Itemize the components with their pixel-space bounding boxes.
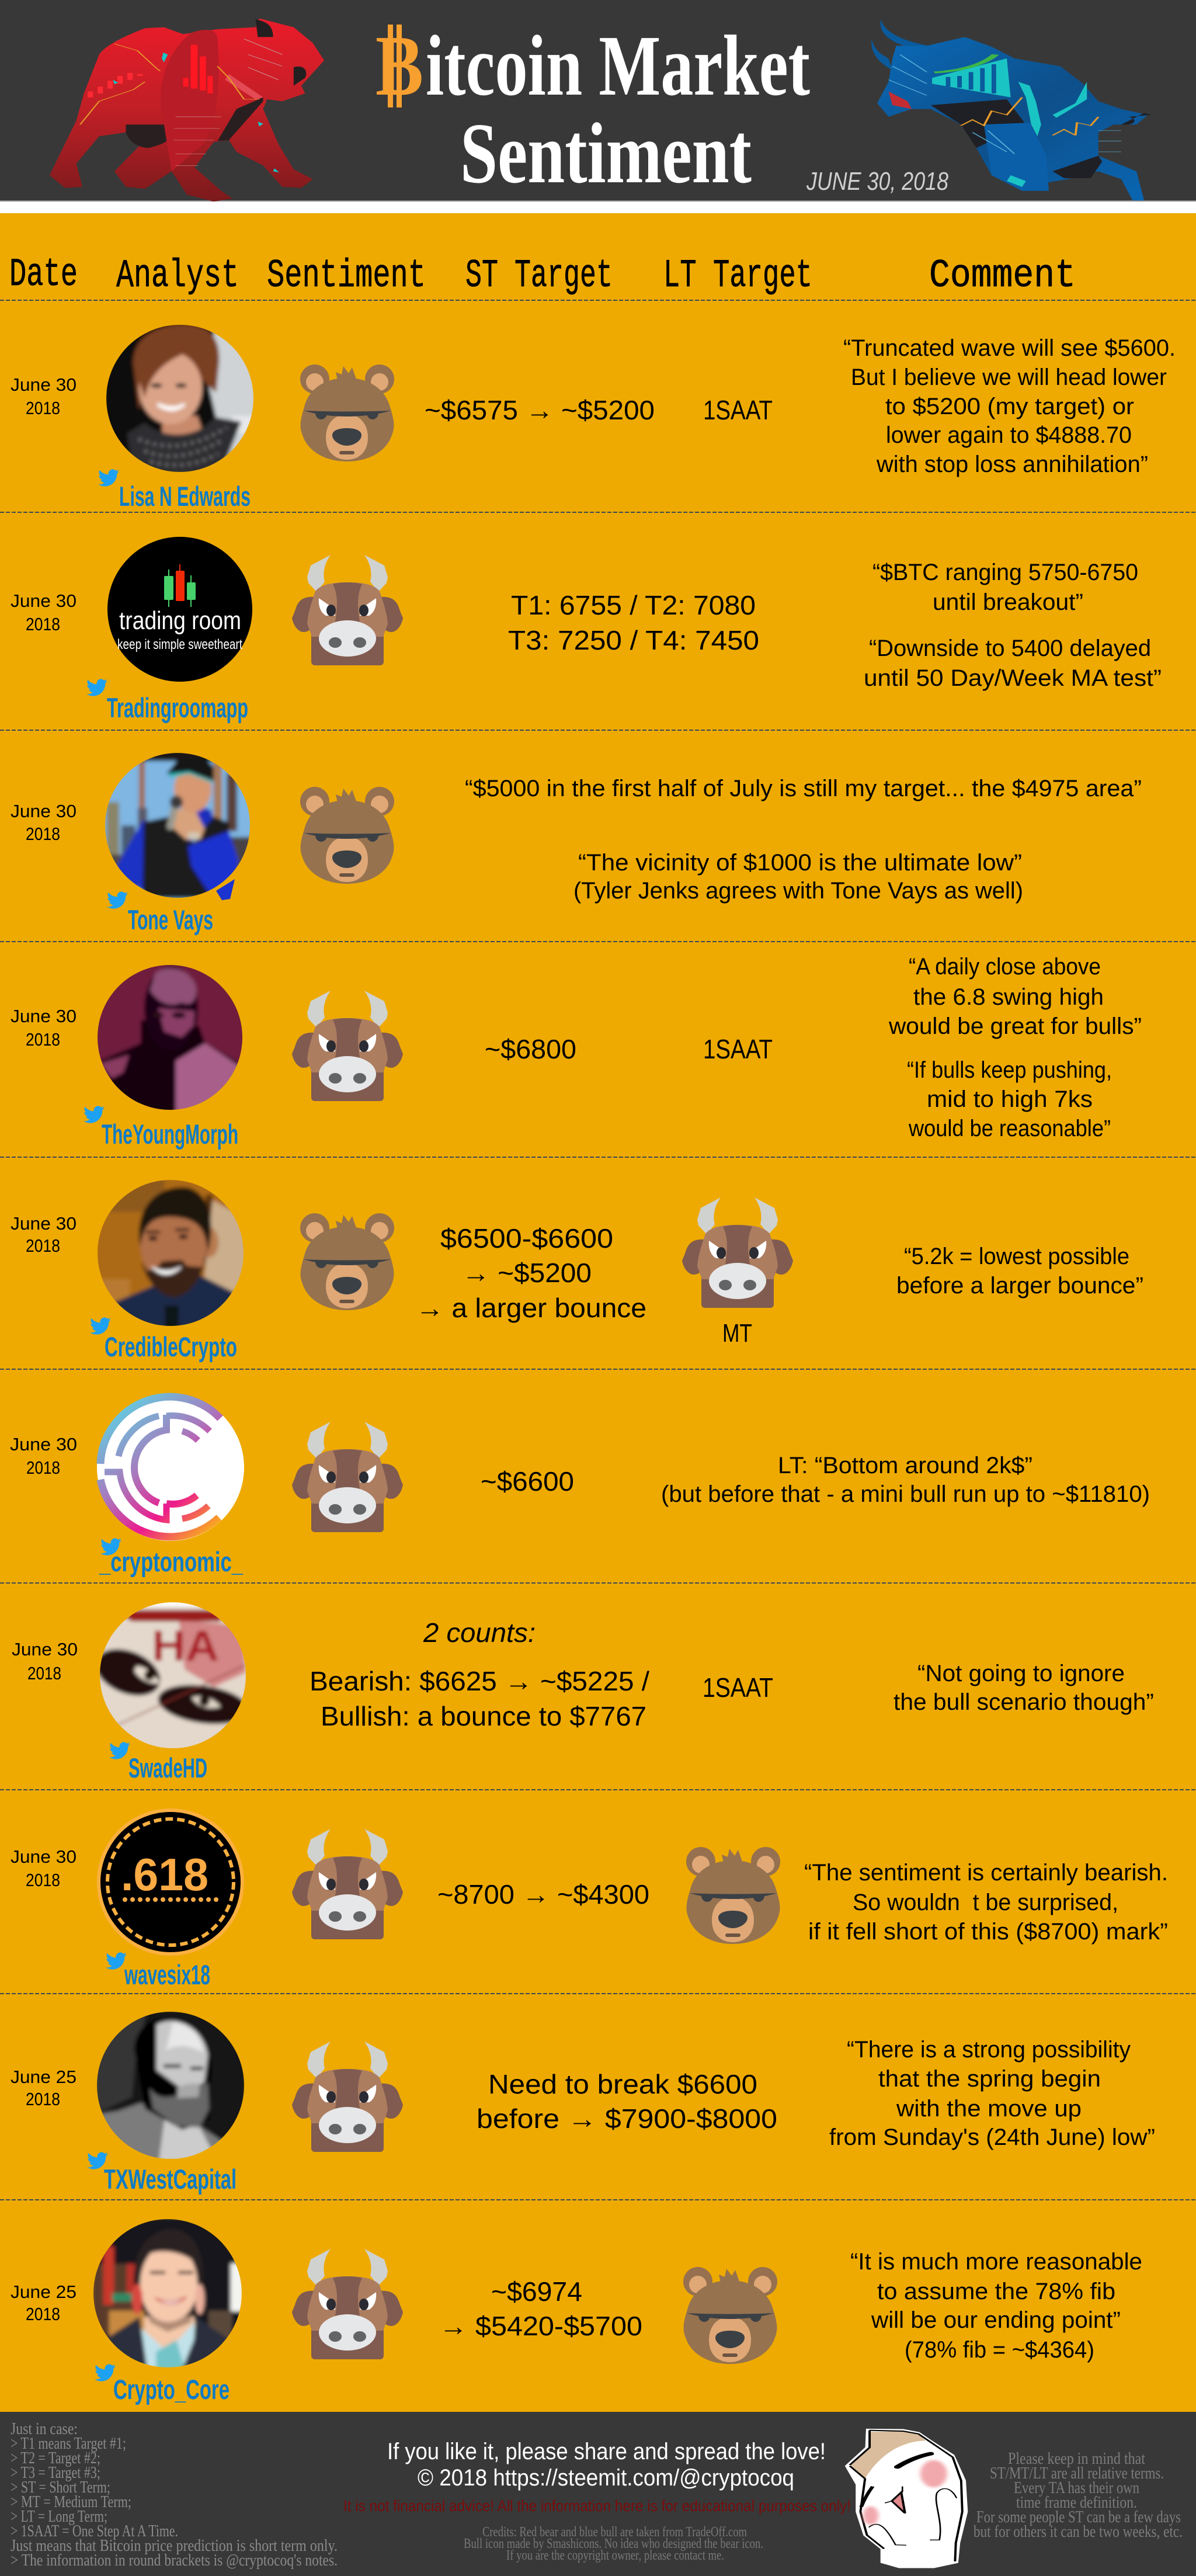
comment: that the spring begin xyxy=(878,2066,1101,2092)
row 8: wavesix18 xyxy=(11,1808,1168,1990)
column headings xyxy=(9,252,1076,298)
avatar: cryptonomic logo xyxy=(97,1394,244,1541)
date: June 30 xyxy=(11,1213,77,1234)
date: 2018 xyxy=(26,1457,60,1478)
sentiment: bullish xyxy=(292,555,403,665)
comment xyxy=(893,1661,1154,1715)
footer: glossary: > T3 = Target #3; xyxy=(11,2463,100,2482)
sentiment: bearish xyxy=(300,364,394,461)
date xyxy=(11,2067,77,2109)
comment: So wouldn t be surprised, xyxy=(853,1890,1118,1915)
date: 2018 xyxy=(26,2304,60,2324)
date: 2018 xyxy=(26,398,60,418)
twitter icon xyxy=(90,1317,111,1335)
twitter icon xyxy=(84,1106,105,1123)
sentiment: bullish xyxy=(292,2249,403,2359)
comment: “The sentiment is certainly bearish. xyxy=(804,1860,1168,1886)
long term target: 1SAAT xyxy=(703,1672,773,1703)
long term target: bearish xyxy=(686,1847,780,1944)
date: June 30 xyxy=(11,591,77,611)
avatar: CredibleCrypto xyxy=(95,1177,246,1329)
date xyxy=(11,1846,77,1890)
date: 2018 xyxy=(26,1870,60,1890)
short term target: $6500-$6600 xyxy=(440,1223,613,1254)
comment: with the move up xyxy=(896,2096,1082,2122)
column headings: Analyst xyxy=(116,254,239,298)
handle: Lisa N Edwards xyxy=(119,481,251,512)
avatar: SwadeHD: HA xyxy=(152,1622,219,1670)
footer: credits: Credits: Red bear and blue bull are taken from TradeOff.com xyxy=(482,2525,747,2540)
short term target: ~$6575 → ~$5200 xyxy=(425,395,655,425)
twitter icon xyxy=(107,891,128,909)
handle: Tone Vays xyxy=(128,904,213,935)
comment: “Not going to ignore xyxy=(917,1661,1125,1686)
comment: until 50 Day/Week MA test” xyxy=(864,665,1162,691)
comment xyxy=(896,1244,1143,1299)
sentiment: bearish xyxy=(300,1213,394,1310)
short term target: before → $7900-$8000 xyxy=(477,2103,777,2134)
avatar: Tone Vays xyxy=(102,749,253,901)
footer: credits xyxy=(464,2525,763,2563)
footer: credits: Bull icon made by Smashicons. No idea who designed the bear icon. xyxy=(464,2536,763,2551)
column headings: LT Target xyxy=(663,254,812,298)
footer: cartoon mascot xyxy=(847,2429,966,2567)
targets xyxy=(508,590,759,655)
short term target: → ~$5200 xyxy=(462,1258,592,1288)
date: June 30 xyxy=(12,1639,78,1660)
footer: glossary: Just in case: xyxy=(11,2419,78,2438)
date: June 30 xyxy=(11,374,77,395)
date: June 30 xyxy=(10,1434,77,1454)
comment: from Sunday's (24th June) low” xyxy=(829,2124,1155,2150)
comment: “$5000 in the first half of July is still my target... the $4975 area” xyxy=(465,776,1142,801)
comment xyxy=(661,1453,1150,1507)
sentiment: bullish xyxy=(292,991,403,1101)
comment: “Downside to 5400 delayed xyxy=(869,636,1151,661)
twitter icon xyxy=(95,2364,116,2381)
date: June 30 xyxy=(11,1006,77,1026)
red bear illustration xyxy=(50,19,324,202)
handle: Tradingroomapp xyxy=(107,692,248,723)
row 5: CredibleCrypto xyxy=(11,1177,1143,1362)
comment: (Tyler Jenks agrees with Tone Vays as well) xyxy=(573,878,1023,904)
date xyxy=(12,1639,78,1683)
avatar: SwadeHD xyxy=(100,1602,246,1748)
sentiment: bearish xyxy=(300,787,394,884)
short term target: → $5420-$5700 xyxy=(439,2311,642,2341)
comment: mid to high 7ks xyxy=(927,1086,1093,1112)
date: June 30 xyxy=(11,1846,77,1867)
long term target: 1SAAT xyxy=(703,1034,773,1064)
short term target: ~$6600 xyxy=(481,1466,574,1497)
row 2: Tradingroomapp xyxy=(11,537,1162,723)
handle: CredibleCrypto xyxy=(105,1331,237,1362)
short term target: Need to break $6600 xyxy=(488,2069,757,2099)
comment: “The vicinity of $1000 is the ultimate low” xyxy=(578,850,1022,876)
row 9: TXWestCapital xyxy=(11,2009,1155,2195)
avatar: Lisa xyxy=(104,322,256,474)
avatar: .618 badge xyxy=(97,1808,244,1956)
title line 2: Sentiment xyxy=(460,106,752,202)
comment xyxy=(850,2249,1142,2363)
short term target: → a larger bounce xyxy=(416,1293,646,1323)
comment: the 6.8 swing high xyxy=(913,984,1104,1010)
comment: But I believe we will head lower xyxy=(851,364,1167,390)
short term target xyxy=(416,1223,646,1323)
header band xyxy=(0,0,1196,213)
targets: T1: 6755 / T2: 7080 xyxy=(511,590,756,620)
avatar: Crypto_Core xyxy=(92,2217,244,2369)
date xyxy=(11,1006,77,1050)
title xyxy=(376,18,810,202)
footer: disclaimer: It is not financial advice! All the information here is for educational purposes only! xyxy=(343,2497,851,2515)
row 4: TheYoungMorph xyxy=(11,954,1142,1150)
footer band xyxy=(0,2412,1196,2576)
comment: would be great for bulls” xyxy=(888,1013,1142,1039)
date: 2018 xyxy=(26,824,60,844)
sentiment: bullish xyxy=(292,1829,403,1939)
comment: the bull scenario though” xyxy=(893,1689,1154,1715)
date: 2018 xyxy=(26,614,60,634)
avatar: trading room logo: keep it simple sweetheart xyxy=(117,637,242,652)
column headings: Comment xyxy=(929,254,1076,298)
avatar: Morph xyxy=(94,961,246,1113)
row 6: _cryptonomic_ xyxy=(10,1394,1150,1577)
comment: (78% fib = ~$4364) xyxy=(905,2337,1094,2363)
blue bull illustration xyxy=(871,19,1152,200)
comment: (but before that - a mini bull run up to ~$11810) xyxy=(661,1481,1150,1507)
footer: glossary: > T1 means Target #1; xyxy=(11,2434,126,2453)
footer: glossary: Just means that Bitcoin price prediction is short term only. xyxy=(11,2536,338,2555)
comment xyxy=(843,335,1176,477)
footer: share message xyxy=(387,2439,826,2491)
footer: time frame note xyxy=(974,2449,1183,2541)
row 10: Crypto_Core xyxy=(11,2217,1142,2405)
sentiment: bullish xyxy=(292,2042,403,2152)
short term target xyxy=(439,2276,642,2341)
date: June 25 xyxy=(11,2067,77,2087)
long term target: bullish MT xyxy=(682,1197,793,1348)
handle: wavesix18 xyxy=(124,1959,210,1990)
footer: glossary: > 1SAAT = One Step At A Time. xyxy=(11,2522,178,2540)
comment: “A daily close above xyxy=(909,954,1101,980)
short term target: Bullish: a bounce to $7767 xyxy=(321,1701,646,1731)
title line 1: itcoin Market xyxy=(426,18,810,114)
handle: TXWestCapital xyxy=(104,2164,237,2195)
comment xyxy=(804,1860,1168,1945)
footer: glossary: > LT = Long Term; xyxy=(11,2507,107,2526)
sentiment: bullish xyxy=(292,1422,403,1532)
comment: “5.2k = lowest possible xyxy=(904,1244,1129,1269)
comment xyxy=(864,560,1162,691)
footer: glossary: > MT = Medium Term; xyxy=(11,2492,131,2511)
targets: T3: 7250 / T4: 7450 xyxy=(508,625,759,655)
short term target xyxy=(310,1617,649,1731)
row 7: SwadeHD xyxy=(12,1599,1154,1783)
comment: until breakout” xyxy=(933,589,1083,615)
short term target xyxy=(477,2069,777,2134)
footer: credits: If you are the copyright owner, please contact me. xyxy=(506,2548,724,2563)
comment xyxy=(829,2037,1155,2150)
twitter icon xyxy=(109,1742,130,1759)
date xyxy=(10,1434,77,1478)
handle: Crypto_Core xyxy=(113,2374,230,2405)
footer: glossary xyxy=(11,2419,338,2570)
handle: TheYoungMorph xyxy=(102,1119,238,1150)
short term target: ~8700 → ~$4300 xyxy=(437,1879,649,1910)
comment: to assume the 78% fib xyxy=(877,2279,1115,2304)
comment: would be reasonable” xyxy=(908,1116,1111,1141)
date: 2018 xyxy=(26,2089,60,2109)
comment: before a larger bounce” xyxy=(896,1273,1143,1299)
footer: time frame note: Please keep in mind that xyxy=(1008,2449,1145,2468)
comment: “$BTC ranging 5750-6750 xyxy=(872,560,1138,585)
comment: “If bulls keep pushing, xyxy=(907,1057,1112,1083)
twitter icon xyxy=(98,469,119,487)
comment: if it fell short of this ($8700) mark” xyxy=(808,1919,1168,1945)
twitter icon xyxy=(106,1952,127,1970)
avatar: trading room logo xyxy=(107,537,252,682)
date xyxy=(11,2282,77,2324)
date xyxy=(11,591,77,634)
footer: share message: If you like it, please share and spread the love! xyxy=(387,2439,826,2464)
short term target: ~$6974 xyxy=(491,2276,582,2307)
date: 2018 xyxy=(26,1029,60,1050)
long term target: bullish MT: MT xyxy=(722,1319,752,1348)
date xyxy=(11,801,77,844)
avatar: TXWestCapital xyxy=(95,2009,246,2161)
footer: glossary: > T2 = Target #2; xyxy=(11,2449,100,2467)
date xyxy=(11,374,77,418)
comment xyxy=(465,776,1142,904)
twitter icon xyxy=(87,2152,108,2169)
report date: JUNE 30, 2018 xyxy=(806,167,948,196)
footer: share message: © 2018 https://steemit.com/@cryptocoq xyxy=(418,2465,794,2491)
date xyxy=(11,1213,77,1256)
date: 2018 xyxy=(27,1663,61,1683)
row 3: Tone Vays xyxy=(11,749,1142,935)
twitter icon xyxy=(86,679,107,696)
bitcoin symbol: B xyxy=(376,18,423,114)
avatar: trading room logo: trading room xyxy=(119,606,241,635)
column headings: Date xyxy=(9,252,78,297)
short term target: Bearish: $6625 → ~$5225 / xyxy=(310,1666,649,1696)
date: June 25 xyxy=(11,2282,77,2302)
avatar: .618 badge: .618 xyxy=(121,1849,208,1900)
long term target: 1SAAT xyxy=(703,395,773,425)
footer: time frame note: Every TA has their own xyxy=(1014,2478,1139,2497)
handle: _cryptonomic_ xyxy=(99,1546,244,1577)
long term target: bearish xyxy=(683,2267,777,2364)
comment xyxy=(888,954,1142,1141)
comment: “It is much more reasonable xyxy=(850,2249,1142,2275)
short term target: ~$6800 xyxy=(485,1034,576,1064)
short term target: 2 counts: xyxy=(423,1617,536,1648)
row 1: Lisa N Edwards xyxy=(11,322,1176,512)
comment: to $5200 (my target) or xyxy=(885,394,1134,419)
twitter icon xyxy=(100,1538,121,1556)
comment: “There is a strong possibility xyxy=(847,2037,1131,2063)
comment: lower again to $4888.70 xyxy=(886,422,1132,448)
comment: “Truncated wave will see $5600. xyxy=(843,335,1176,361)
comment: LT: “Bottom around 2k$” xyxy=(778,1453,1032,1478)
footer: glossary: > ST = Short Term; xyxy=(11,2478,110,2497)
date: 2018 xyxy=(26,1235,60,1256)
comment: with stop loss annihilation” xyxy=(876,452,1148,477)
handle: SwadeHD xyxy=(128,1752,207,1783)
column headings: Sentiment xyxy=(267,254,426,298)
comment: will be our ending point” xyxy=(871,2307,1121,2333)
footer: glossary: > The information in round brackets is @cryptocoq's notes. xyxy=(11,2551,338,2570)
column headings: ST Target xyxy=(465,254,613,298)
date: June 30 xyxy=(11,801,77,821)
footer: time frame note: time frame definition. xyxy=(1016,2493,1137,2512)
